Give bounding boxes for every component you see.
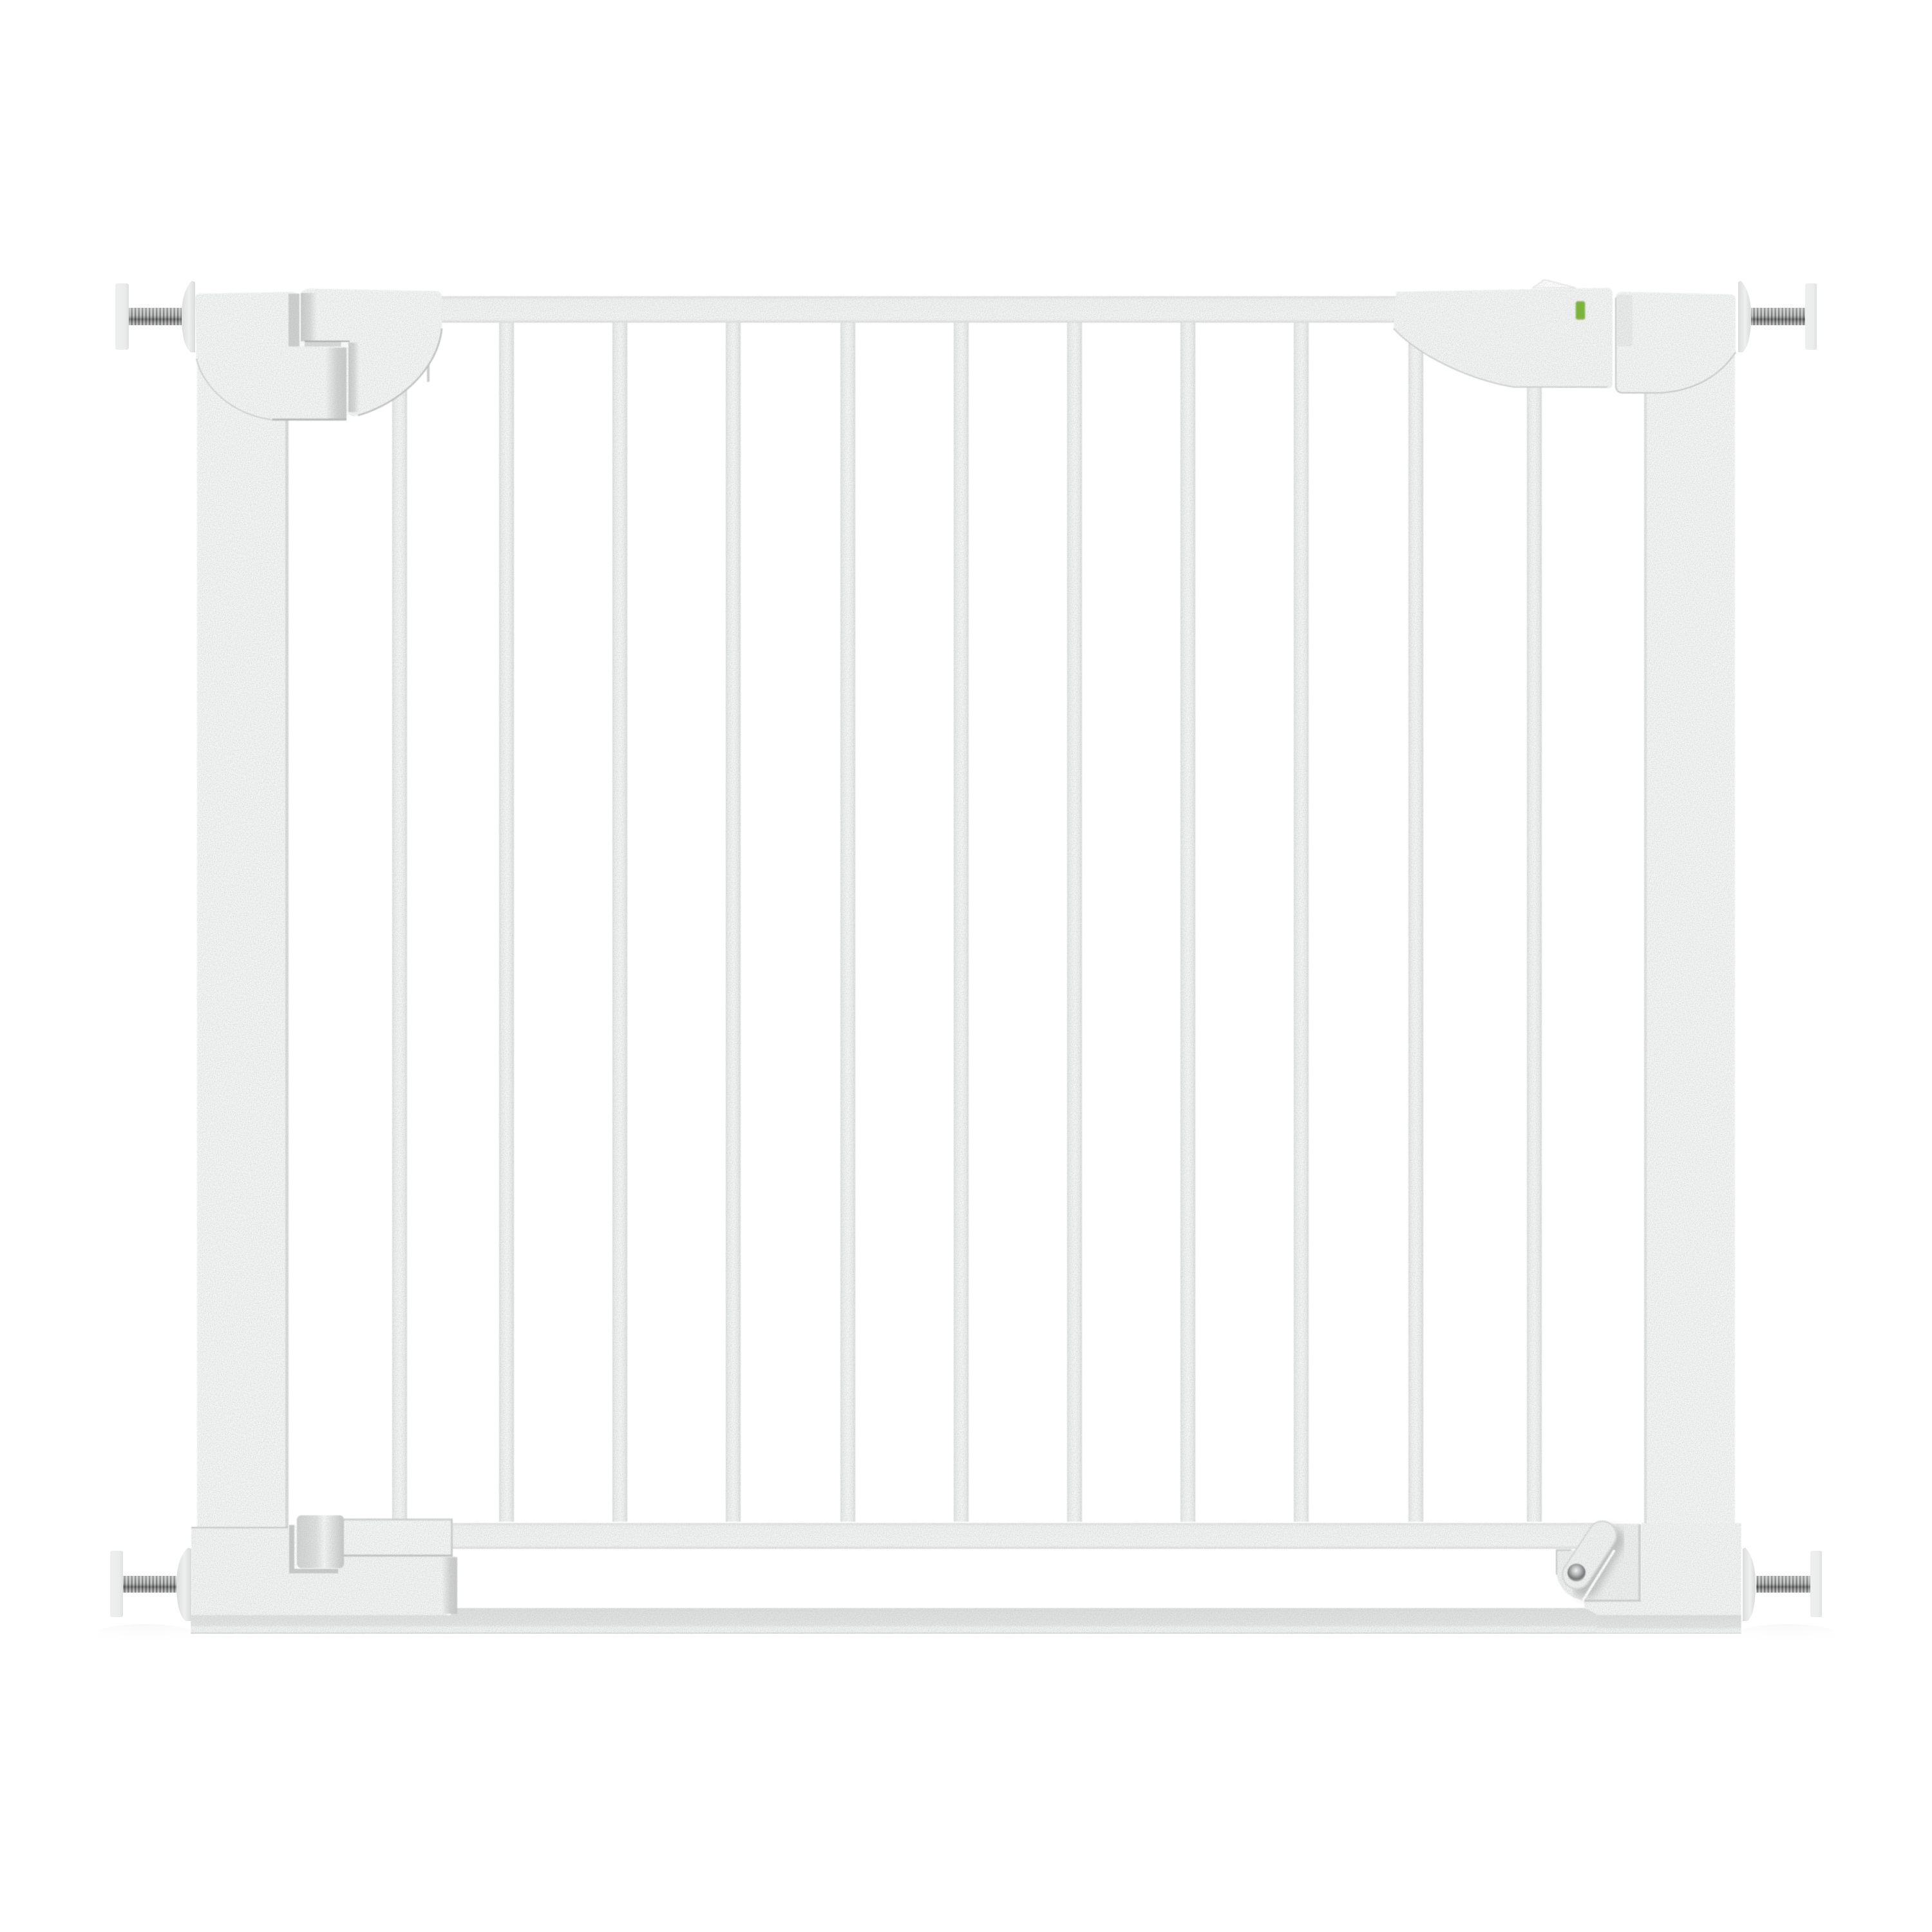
latch plate with pivot arc	[1557, 1524, 1639, 1600]
bracket left piece	[195, 292, 346, 420]
top-right latch housing	[1394, 279, 1613, 388]
diagonal highlight	[1583, 1550, 1615, 1600]
bracket right piece	[301, 289, 442, 416]
bolt: bottom right	[1743, 1548, 1822, 1621]
latch foot	[1584, 1523, 1741, 1615]
steel ball	[1567, 1564, 1586, 1582]
top-right post cap	[1616, 292, 1736, 393]
housing	[1394, 288, 1613, 388]
hinge hook	[427, 365, 430, 382]
gate bars	[392, 322, 1542, 1522]
floor shadows	[93, 1624, 1839, 1645]
post foot	[191, 1528, 457, 1615]
hinge cylinder	[297, 1515, 344, 1568]
left post	[197, 335, 289, 1528]
bottom-left hinge block	[191, 1515, 457, 1615]
bolt: bottom left	[110, 1548, 191, 1621]
top-left bracket	[195, 289, 442, 421]
bolt: top right	[1738, 281, 1817, 352]
bolt: top left	[115, 281, 195, 352]
bottom-right latch block	[1557, 1523, 1741, 1634]
upper door block	[344, 1519, 452, 1555]
tab	[1533, 279, 1576, 288]
lever shadow	[1586, 1540, 1611, 1584]
gate body	[191, 279, 1741, 1634]
top rail	[440, 296, 1400, 323]
right post	[1644, 335, 1735, 1526]
lower rail	[451, 1523, 1597, 1549]
lever	[1577, 1535, 1602, 1575]
base rail	[191, 1608, 1741, 1634]
green indicator	[1576, 301, 1585, 319]
hinge pin	[305, 341, 341, 346]
